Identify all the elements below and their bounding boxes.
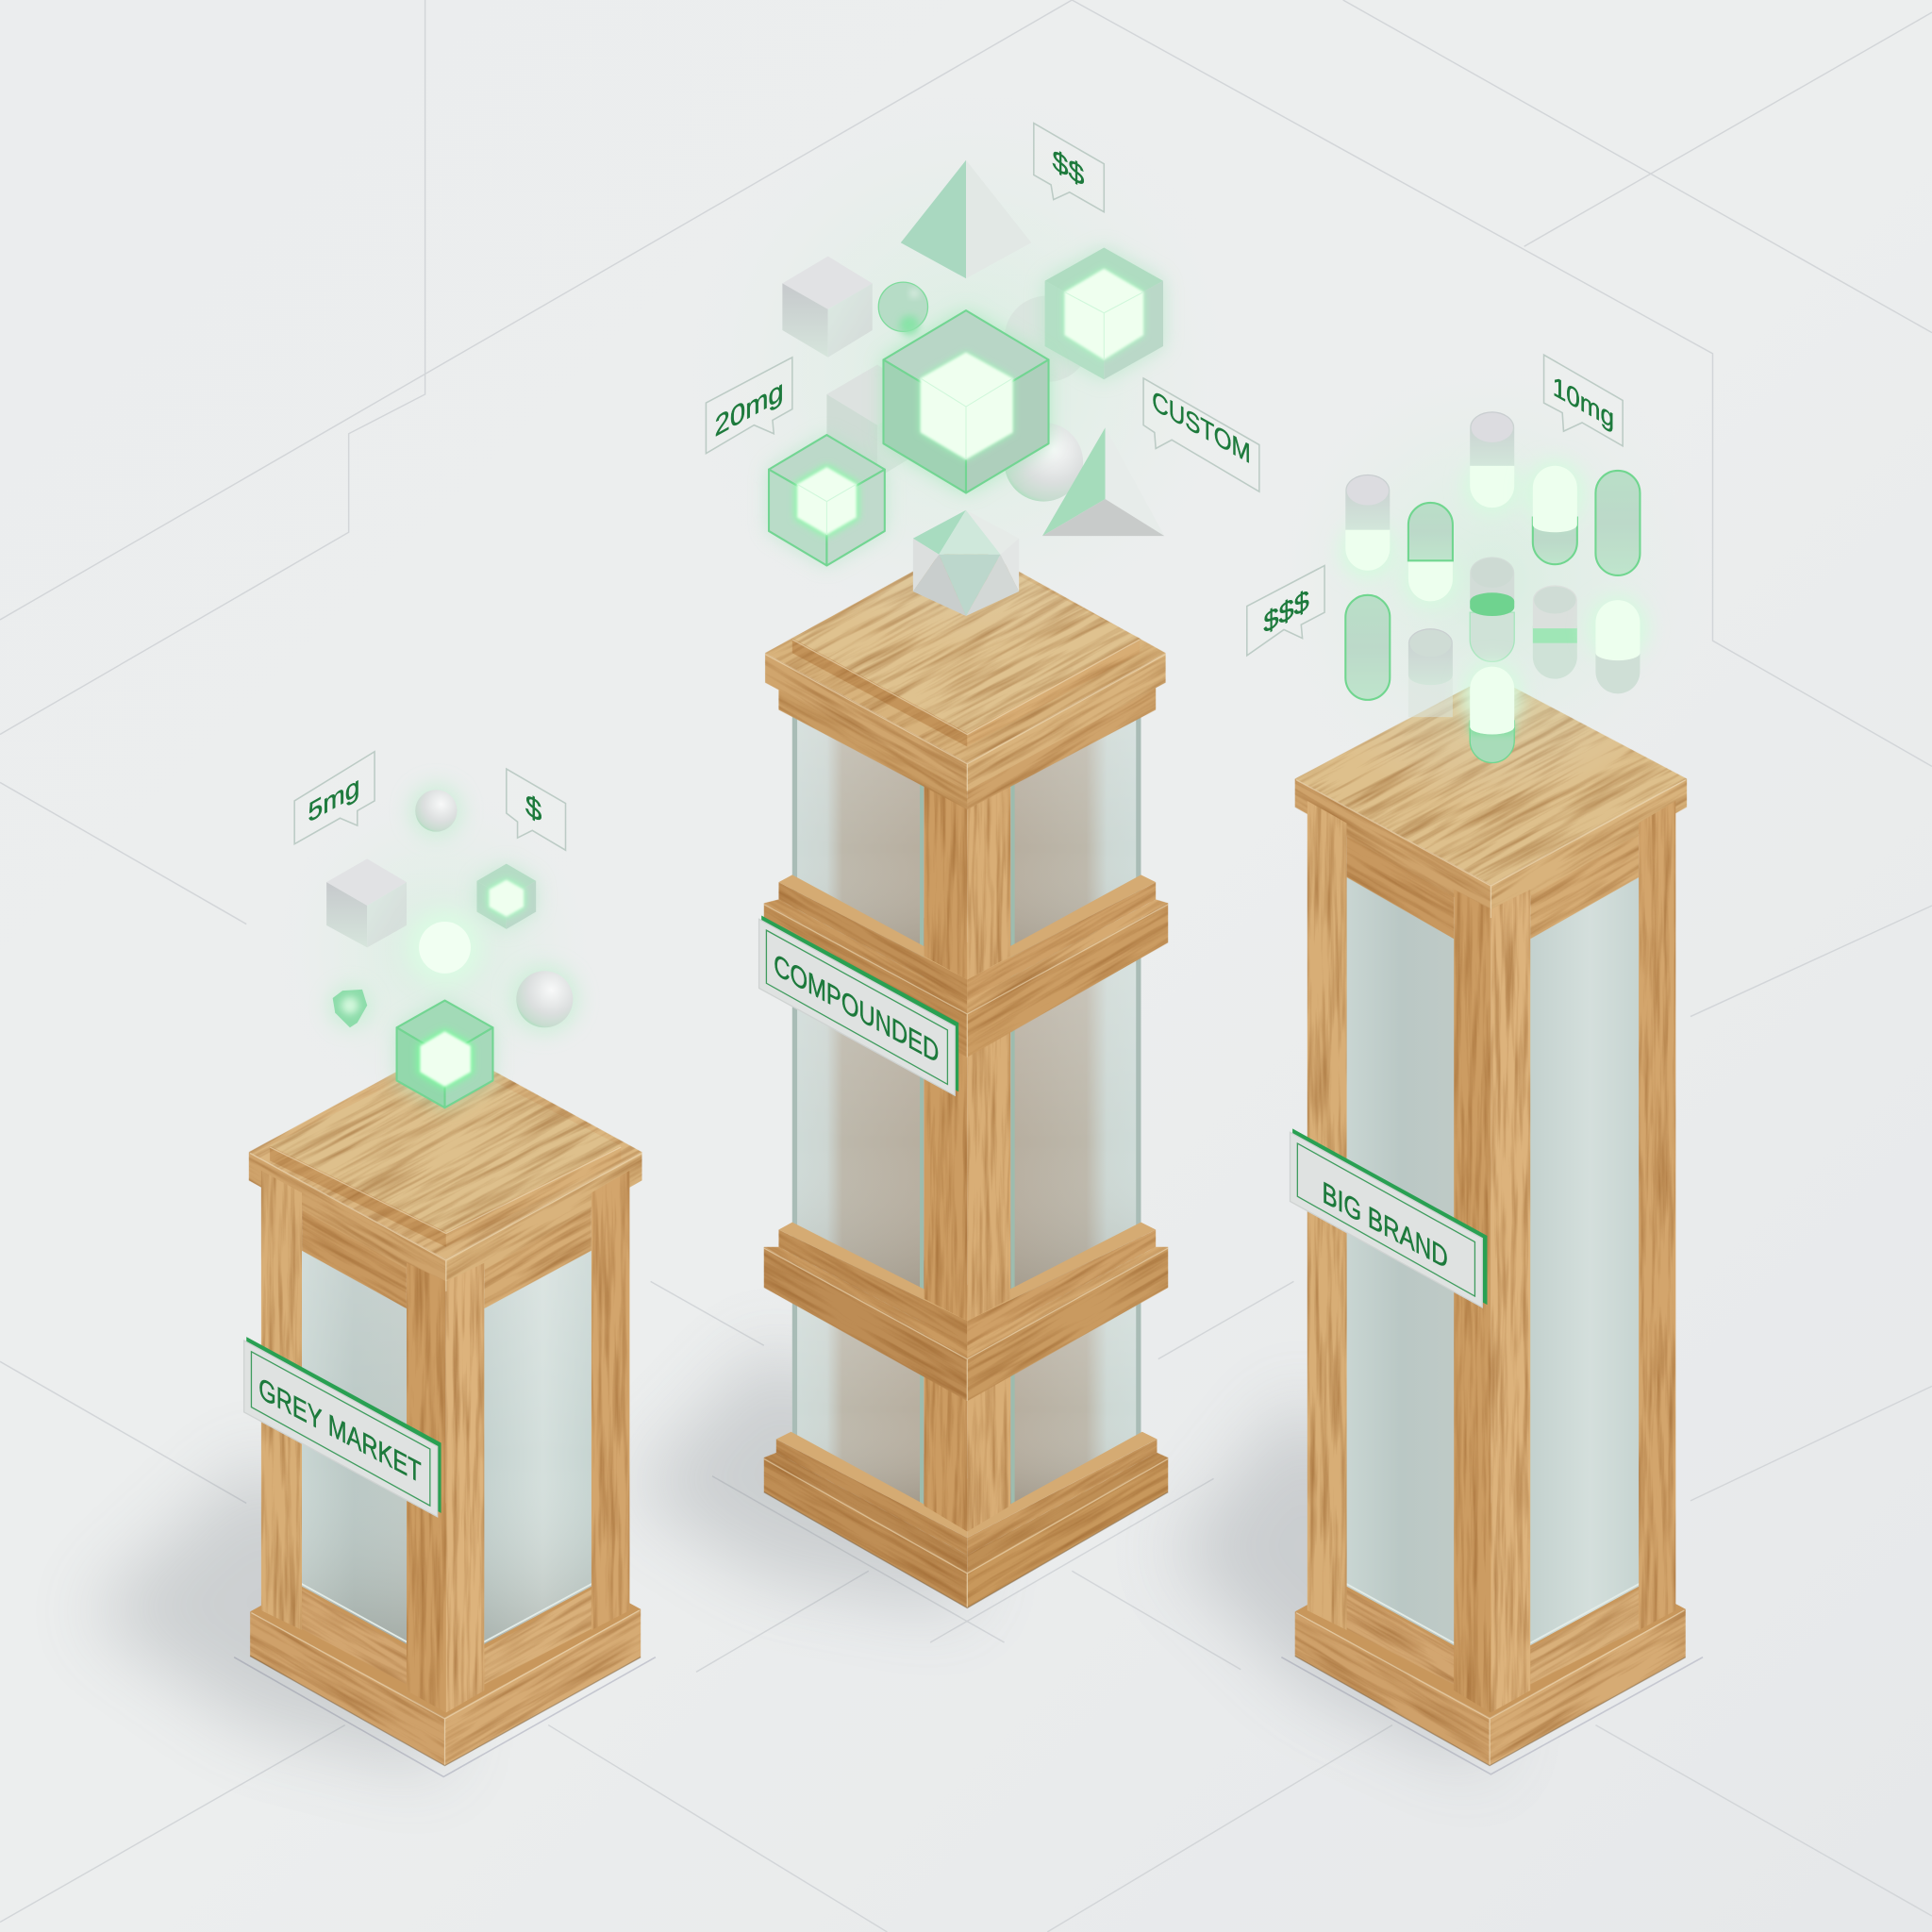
pyramid: green white (901, 160, 1031, 278)
capsule: full green, lower left (1345, 595, 1390, 700)
pedestal: grey market (0, 882, 908, 1851)
gem: small green (329, 986, 371, 1027)
cluster: big brand capsules (1247, 355, 1647, 762)
cube: glass upper right (1045, 248, 1163, 379)
wood edge highlights (1296, 780, 1686, 1766)
cluster: compounded shapes (706, 124, 1259, 616)
speech bubble: $$ (1034, 124, 1104, 212)
base ledge (1295, 1503, 1686, 1718)
plaque: grey market: GREY MARKET (258, 1372, 422, 1491)
capsule: white with green band, centre (1470, 557, 1514, 661)
capsule: white and glow, top (1465, 411, 1519, 514)
wood right faces (1062, 693, 1932, 1851)
wood ledges over the glass (776, 874, 1157, 1538)
green halo: big brand cluster (1264, 351, 1720, 808)
cube: glass on pedestal (397, 1001, 492, 1108)
speech bubble: $ (507, 769, 566, 850)
pedestal: compounded (350, 376, 1582, 1696)
sphere: large white (510, 965, 579, 1034)
wood base, left grain (0, 1067, 711, 1851)
base ledge (250, 1503, 641, 1718)
wood bands, right faces (554, 566, 1582, 1695)
speech bubble: 5mg (294, 752, 375, 844)
plaque: compounded (759, 915, 958, 1095)
cube: large glass centre (883, 310, 1049, 492)
sphere: lower large (1004, 423, 1083, 502)
sphere: small glass (878, 282, 928, 335)
speech bubble: $$$ (1247, 566, 1324, 656)
base contact shadow line (764, 1492, 1168, 1607)
wood edge highlights (764, 640, 1168, 1607)
cube: grey behind large cube (826, 365, 924, 478)
capsule: white fading onto pedestal (1408, 628, 1453, 717)
sphere: small white (409, 784, 463, 838)
speech bubble: custom: CUSTOM (1152, 384, 1251, 470)
plaque: compounded: COMPOUNDED (774, 948, 939, 1071)
sphere: glowing (408, 910, 482, 985)
plaque: grey market (244, 1337, 441, 1517)
capsule: full green, upper right (1595, 471, 1640, 575)
tetrahedron: green white (1042, 427, 1164, 536)
speech bubble: 5mg: 5mg (308, 769, 359, 829)
sphere: back large (1004, 295, 1091, 382)
speech bubble: 10mg: 10mg (1553, 370, 1614, 435)
wood edge highlights (250, 1147, 641, 1766)
glass panes (1345, 862, 1640, 1646)
glass panes (301, 1232, 592, 1645)
wood left faces (868, 694, 1918, 1851)
wood top (160, 882, 731, 1423)
wood post (924, 774, 1010, 1532)
wood top (674, 376, 1257, 928)
base contact shadow line (1295, 1656, 1686, 1766)
cluster: grey market shapes (294, 752, 579, 1108)
speech bubble: $: $ (525, 788, 542, 830)
icosahedron (913, 510, 1019, 616)
green halo: grey market cluster (277, 789, 597, 1109)
capsule: white and glow, row one left (1341, 475, 1395, 578)
speech bubble: $$: $$ (1052, 143, 1084, 192)
capsule: white with green band, right (1533, 585, 1577, 679)
wood bands, left faces (350, 565, 1381, 1696)
base contact shadow line (250, 1656, 641, 1766)
capsule: glow and green on pedestal (1462, 661, 1522, 762)
cube: glass lower left (769, 435, 885, 566)
capsule: glow and green (1525, 460, 1585, 564)
cube: small glass glowing (476, 864, 536, 929)
speech bubble: 10mg (1544, 355, 1623, 446)
wood top (1208, 513, 1774, 1047)
wood posts (261, 1171, 629, 1713)
plaque: big brand: BIG BRAND (1322, 1175, 1448, 1276)
cube: white upper left (782, 257, 873, 358)
capsule: glow and white (1589, 596, 1647, 693)
pedestal: big brand (868, 513, 1932, 1851)
wood posts (1307, 801, 1675, 1713)
glass panes (792, 705, 1141, 1509)
capsule: green and glow (1404, 503, 1457, 607)
wood post front segment over ledges (924, 918, 1010, 1532)
green halo: compounded cluster (690, 92, 1244, 647)
floor shadows (86, 1343, 1491, 1774)
cube: white (326, 858, 407, 947)
speech bubble: 20mg: 20mg (715, 373, 784, 443)
speech bubble: 20mg (706, 358, 792, 454)
wood right faces (179, 1067, 908, 1851)
speech bubble: $$$: $$$ (1263, 583, 1309, 640)
plaque: big brand (1291, 1128, 1487, 1307)
